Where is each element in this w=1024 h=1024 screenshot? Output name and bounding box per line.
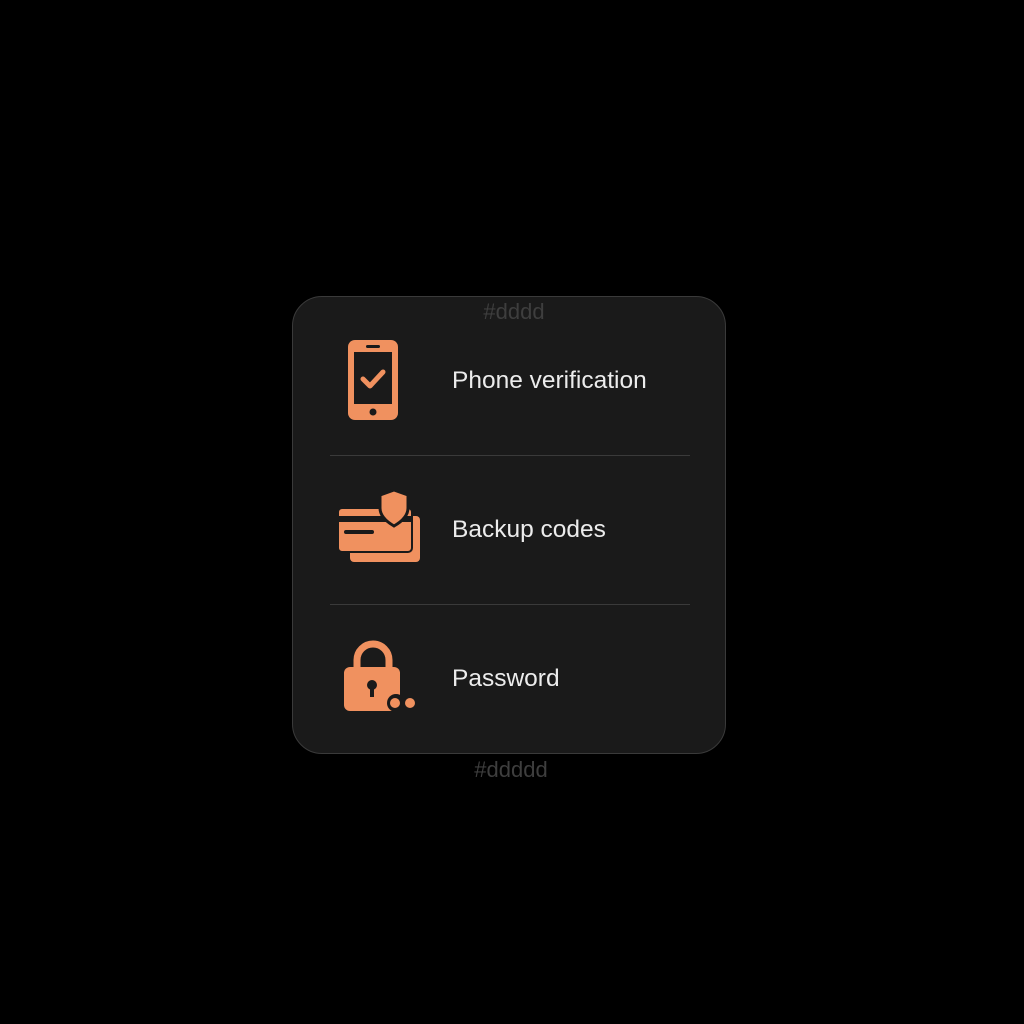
label: backup codes: Backup codes xyxy=(452,516,606,543)
label: password: Password xyxy=(452,665,560,692)
icon: cards with shield xyxy=(339,492,420,562)
top placeholder text: #dddd xyxy=(483,299,545,324)
icon: padlock with dots xyxy=(344,640,415,711)
label: phone verification: Phone verification xyxy=(452,367,647,394)
icon: phone with check xyxy=(348,340,398,420)
panel: card xyxy=(292,296,726,754)
bottom placeholder text: #ddddd xyxy=(474,757,548,782)
